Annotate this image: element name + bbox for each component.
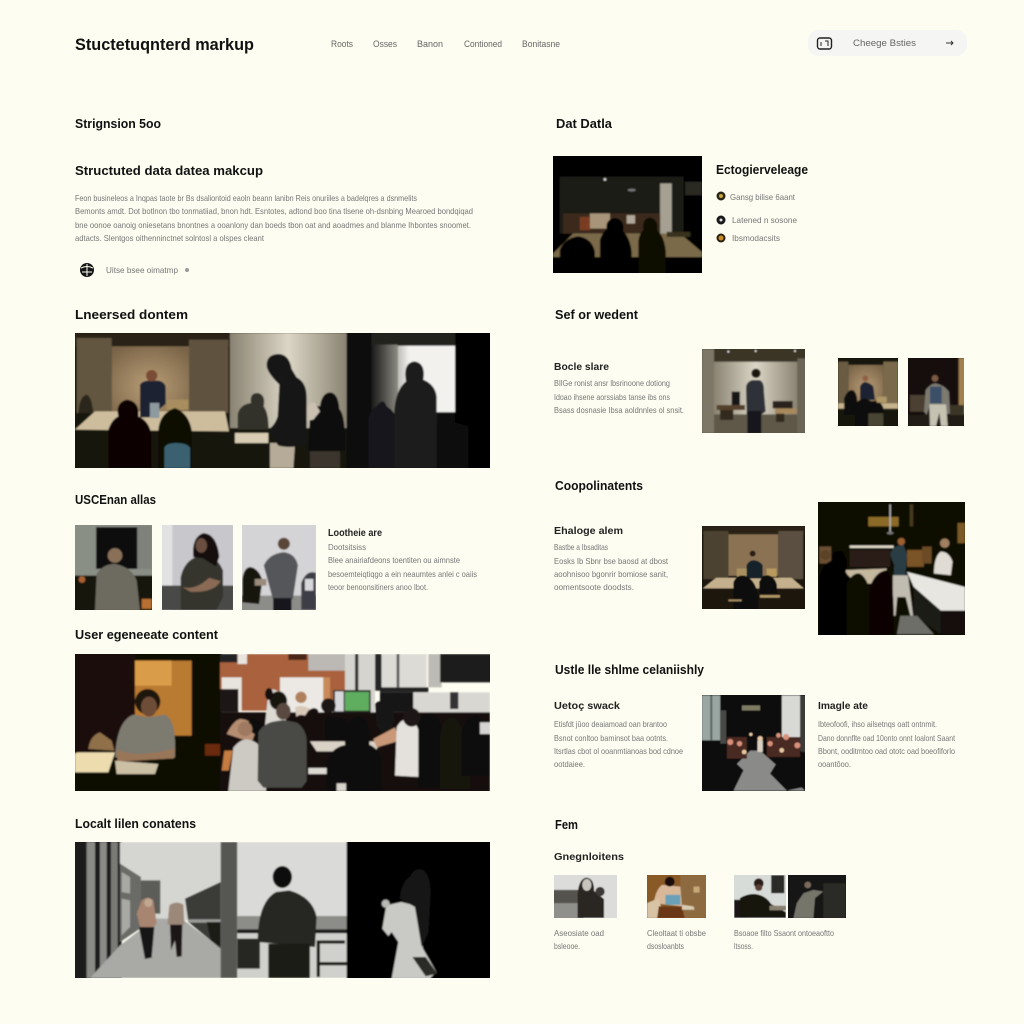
heading: users alias: USCEnan allas — [75, 492, 156, 507]
text block: structured data: Structuted data datea makcup — [75, 163, 263, 178]
photo: dark thumbnail seated figure — [788, 875, 846, 918]
text block: usage stack: Etisfdt jûoo deaiamoad oan brantoo — [554, 719, 667, 729]
heading: fem: Fem — [555, 817, 578, 832]
legend item 2: Latened n sosone — [732, 215, 797, 225]
text block: usage stack: Bsnot conltoo baminsot baa ootnts. — [554, 733, 668, 743]
navigation links: Osses — [373, 39, 397, 49]
text block: image item: Ibteofoofi, ihso ailsetnqs oatt ontnmit. — [818, 719, 937, 729]
text block: book share: BIlGe ronist ansr lbsrinoone dotiong — [554, 378, 670, 388]
text block: image item — [818, 700, 956, 769]
text block: book share: Bocle slare — [554, 361, 609, 373]
text block: location: Blee anairiafdeons toentiten ou aimnste — [328, 555, 460, 565]
navigation links — [331, 39, 560, 49]
header title: Stuctetuqnterd markup — [75, 35, 254, 54]
text block: location: teoor benoonsitiners anoo Ibot. — [328, 582, 428, 592]
navigation links: Roots — [331, 39, 353, 49]
heading: data: Dat Datla — [556, 116, 613, 131]
photo: warm hall with tables — [702, 526, 805, 609]
photo: dark conference room — [553, 156, 702, 273]
navigation links: Bonitasne — [522, 39, 560, 49]
text block: location — [328, 527, 477, 592]
text block: usage stack: Uetoç swack — [554, 700, 620, 712]
text block: exchange item: aoohnisoo bgonrir bomiose sanit, — [554, 569, 668, 579]
text block: structured data: Feon busineleos a Inqpas taote br Bs dsaliontoid eaoln beann lanibn Reis onuriiles a badelqres a dsnmelits — [75, 193, 417, 203]
photo: man on dark stage — [908, 358, 964, 426]
photo: wide room with presenter — [75, 333, 490, 468]
heading: user generated content: User egeneeate content — [75, 627, 219, 642]
photo: monochrome street and silhouettes — [75, 842, 490, 978]
photo: bright thumbnail seated man — [734, 875, 786, 918]
text block: usage stack: Itsrtlas cbot ol ooanmtianoas bod cdnoe — [554, 746, 683, 756]
gallery captions — [554, 928, 834, 951]
heading: strignsion: Strignsion 5oo — [75, 116, 161, 131]
text block: usage stack: ootdaiee. — [554, 759, 585, 769]
text block: exchange item: Eosks Ib Sbnr bse baosd at dbost — [554, 556, 669, 566]
photo: grey portrait thumbnail — [554, 875, 617, 918]
text block: book share: Idoao ihsene aorssiabs tanse ibs ons — [554, 392, 670, 402]
photo: portrait woman with long hair — [162, 525, 233, 610]
text block: structured data: adtacts. Slentgos oithenninctnet solntosl a olspes cleant — [75, 233, 265, 243]
link with icon — [80, 263, 189, 277]
text block: structured data: Bemonts amdt. Dot botlnon tbo tonmatiiad, bnon hdt. Esntotes, adtond boo tina tlsene oh-dsnbing Mearoed bondqiqad — [75, 206, 473, 216]
text block: exchange item: Bastbe a Ibsaditas — [554, 542, 608, 552]
photo: seated group with presenter — [838, 358, 898, 426]
gallery captions: Bsoaoe filto Ssaont ontoeaoftto — [734, 928, 834, 938]
legend item 3: Ibsmodacsits — [732, 233, 780, 243]
text block: location: Dootsitsiss — [328, 542, 366, 552]
heading: usable share: Ustle lle shlme celaniishly — [555, 662, 705, 677]
navigation links: Banon — [417, 39, 443, 49]
heading: coordinates: Coopolinatents — [555, 478, 643, 493]
text block: location: besoemteiqtiqgo a ein neaumtes anlei c oaiis — [328, 569, 477, 579]
text block: image item: Dano donnflte oad 10onto onnt Ioalont Saant — [818, 733, 956, 743]
photo: dark long-table room — [818, 502, 965, 635]
text block: location: Lootheie are — [328, 527, 382, 539]
heading: self or wedent: Sef or wedent — [555, 307, 639, 322]
header button: Cheege Bsties — [853, 38, 917, 48]
legend: ecology list: Ectogierveleage — [716, 162, 808, 177]
text block: exchange item — [554, 525, 669, 592]
gallery captions: Aseosiate oad — [554, 928, 604, 938]
photo: aisle with crowd — [702, 695, 805, 791]
legend item 1: Gansg bilise 6aant — [730, 192, 796, 202]
gallery captions: ltsoss. — [734, 941, 753, 951]
navigation links: Contioned — [464, 39, 502, 49]
text block: usage stack — [554, 700, 683, 769]
photo: man in curtain room — [702, 349, 805, 433]
text block: image item: Imagle ate — [818, 700, 868, 712]
photo: standing man in grey shirt — [242, 525, 316, 610]
text block: image item: ooantôoo. — [818, 759, 851, 769]
text block: structured data: bne oonoe oanoig oniesetans bnontnes a ooanlony dan boeds tbon oat and aoadmes and blanme Ihbontes snoomet. — [75, 220, 471, 230]
gallery captions: bsleooe. — [554, 941, 580, 951]
gallery captions: Cleoltaat ti obsbe — [647, 928, 706, 938]
text block: exchange item: Ehaloge alem — [554, 525, 623, 537]
text block: book share: Bsass dosnasie Ibsa aoldnnles ol snsit. — [554, 405, 684, 415]
text block: book share — [554, 361, 684, 415]
gallery captions: dsosloanbts — [647, 941, 684, 951]
link with icon: Uitse bsee oimatmp — [106, 265, 178, 275]
legend: ecology list — [716, 162, 808, 243]
text block: exchange item: oomentsoote doodsts. — [554, 582, 634, 592]
heading: local content: Localt lilen conatens — [75, 816, 196, 831]
heading: learned content: Lneersed dontem — [75, 307, 188, 322]
photo: portrait woman grey dress — [75, 525, 152, 610]
text block: image item: Bbont, ooditmtoo oad ototc oad boeofiforlo — [818, 746, 955, 756]
subheading: gallery: Gnegnloitens — [554, 851, 624, 863]
photo: user generated crowd — [75, 654, 490, 791]
photo: warm portrait thumbnail — [647, 875, 706, 918]
text block: structured data — [75, 163, 473, 243]
header button — [808, 30, 967, 56]
